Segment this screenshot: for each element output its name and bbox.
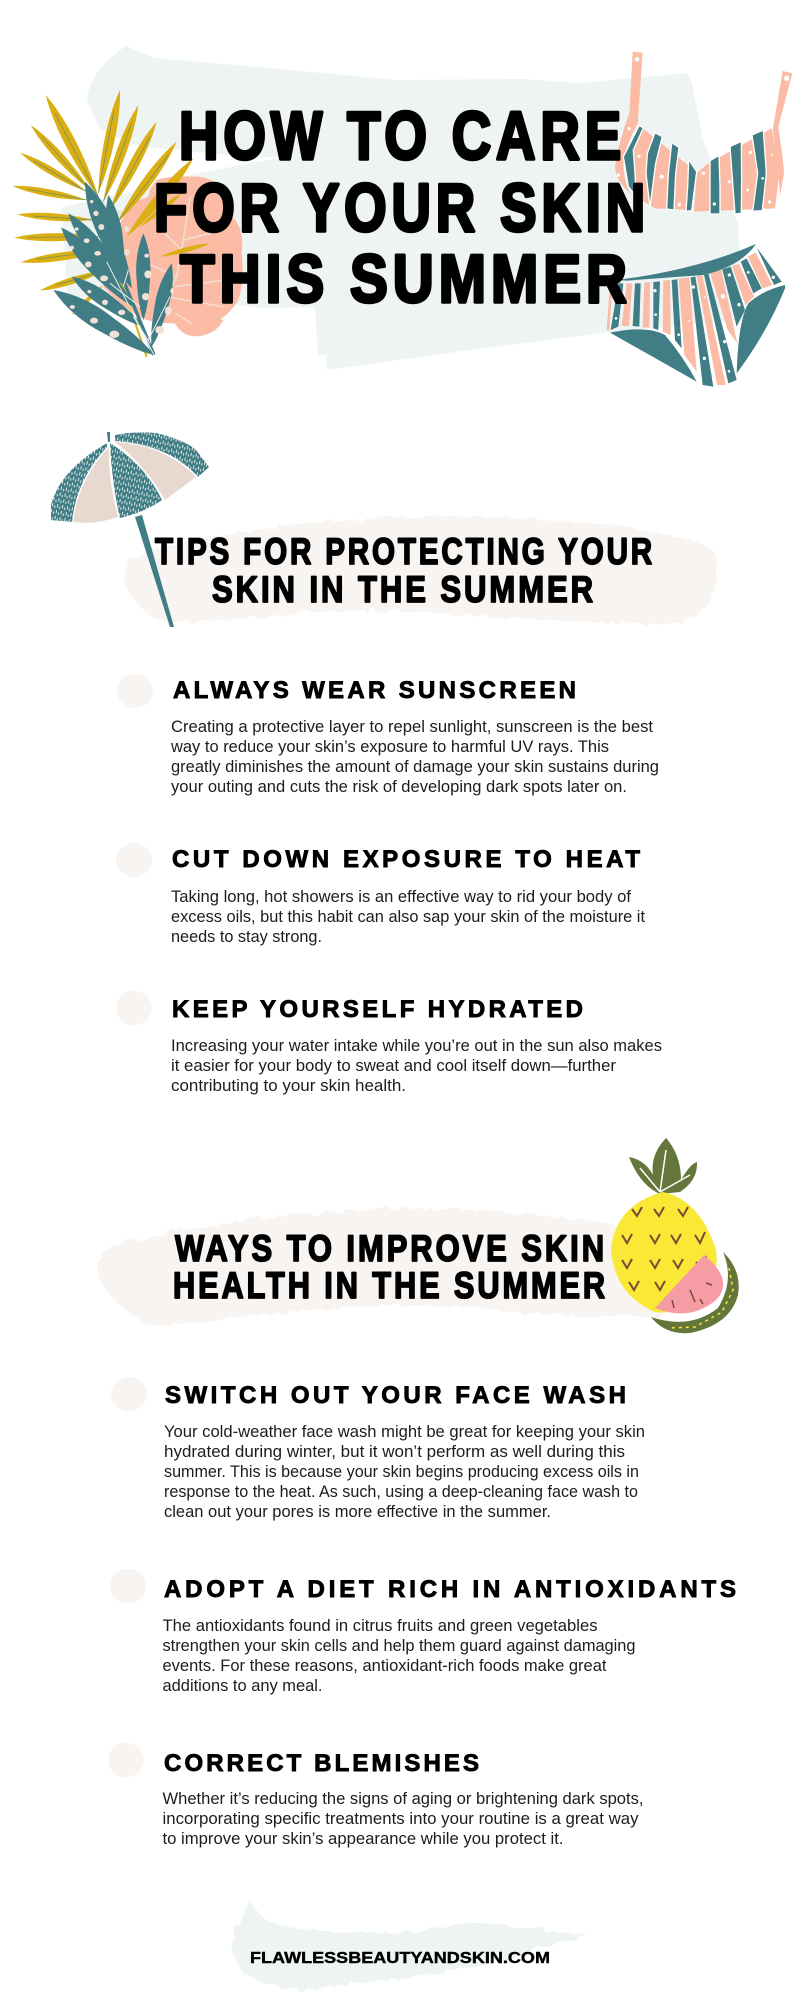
tip heading: KEEP YOURSELF HYDRATED [172,996,583,1023]
section 2 brush blob [97,1209,680,1325]
tip heading: SWITCH OUT YOUR FACE WASH [165,1382,626,1409]
footer url: FLAWLESSBEAUTYANDSKIN.COM [250,1950,550,1967]
tip body: hydrated during winter, but it won’t perform as well during this [164,1443,625,1461]
bullet [110,1569,146,1603]
tip body: greatly diminishes the amount of damage your skin sustains during [171,758,659,776]
tip body [171,888,645,946]
tip body [171,1037,662,1095]
icon: beach umbrella [51,432,209,627]
tip body: excess oils, but this habit can also sap your skin of the moisture it [171,908,645,926]
tip body: summer. This is because your skin begins producing excess oils in [164,1463,639,1481]
gold palm frond [12,89,211,357]
tip body: incorporating specific treatments into your routine is a great way [162,1810,639,1828]
title brush blob [62,46,741,370]
tip body: Increasing your water intake while you’re out in the sun also makes [171,1037,662,1055]
tip: cut down exposure to heat [116,843,645,946]
tip heading: CORRECT BLEMISHES [164,1750,479,1777]
bikini top [615,52,792,214]
tip body: response to the heat. As such, using a deep-cleaning face wash to [164,1483,638,1501]
tip: correct blemishes [108,1743,644,1848]
monstera leaf [103,176,243,336]
tip: switch out your face wash [111,1377,645,1521]
tip body [170,718,659,796]
icon: tropical leaves [12,89,243,363]
bullet [108,1743,144,1777]
title: HOW TO CARE [179,98,626,174]
tip: adopt a diet rich in antioxidants [110,1569,736,1695]
bullet [111,1377,147,1411]
footer brush blob [232,1900,588,1990]
bikini bottom [607,244,785,387]
tip body: events. For these reasons, antioxidant-rich foods make great [162,1657,607,1675]
watermelon flesh [655,1255,723,1313]
section 1 heading: SKIN IN THE SUMMER [212,569,596,610]
tip body: to improve your skin’s appearance while you protect it. [162,1830,564,1848]
tip body: contributing to your skin health. [171,1077,406,1095]
tip body: needs to stay strong. [171,928,322,946]
tip heading: CUT DOWN EXPOSURE TO HEAT [172,846,640,873]
tip body: Whether it’s reducing the signs of aging or brightening dark spots, [162,1790,644,1808]
section 1 heading [155,531,655,610]
tip heading: ADOPT A DIET RICH IN ANTIOXIDANTS [164,1576,736,1603]
tip body: The antioxidants found in citrus fruits and green vegetables [162,1617,598,1635]
icon: bikini [607,52,792,387]
tip body: Creating a protective layer to repel sunlight, sunscreen is the best [171,718,653,736]
watermelon rind [651,1252,739,1333]
tip body: Your cold-weather face wash might be great for keeping your skin [164,1423,645,1441]
bullet [116,843,152,877]
section 1 heading: TIPS FOR PROTECTING YOUR [155,531,655,572]
section 2 heading: WAYS TO IMPROVE SKIN [175,1228,607,1269]
tip body [162,1790,644,1848]
tip body: Taking long, hot showers is an effective way to rid your body of [171,888,631,906]
pineapple marks [622,1207,706,1290]
section 2 heading [173,1228,608,1306]
title [154,98,650,317]
bullet [117,674,153,708]
tip body: additions to any meal. [162,1677,322,1695]
tip: always wear sunscreen [117,674,659,796]
tip: keep yourself hydrated [116,991,662,1095]
pineapple body [611,1192,717,1312]
section 2 heading: HEALTH IN THE SUMMER [173,1265,608,1306]
title: THIS SUMMER [180,241,632,317]
tip body [164,1423,645,1521]
bullet [116,991,152,1025]
tip body: clean out your pores is more effective in the summer. [164,1503,551,1521]
pineapple leaves [629,1138,697,1194]
section 1 brush blob [124,517,718,625]
tip heading: ALWAYS WEAR SUNSCREEN [173,677,576,704]
teal spotted leaves [48,178,179,363]
tip body: way to reduce your skin’s exposure to harmful UV rays. This [170,738,609,756]
icon: pineapple and watermelon [611,1138,739,1333]
tip body: your outing and cuts the risk of developing dark spots later on. [171,778,627,796]
title: FOR YOUR SKIN [154,170,650,246]
tip body [162,1617,636,1695]
watermelon seeds [672,1283,712,1308]
tip body: it easier for your body to sweat and cool itself down—further [171,1057,617,1075]
tip body: strengthen your skin cells and help them guard against damaging [162,1637,636,1655]
